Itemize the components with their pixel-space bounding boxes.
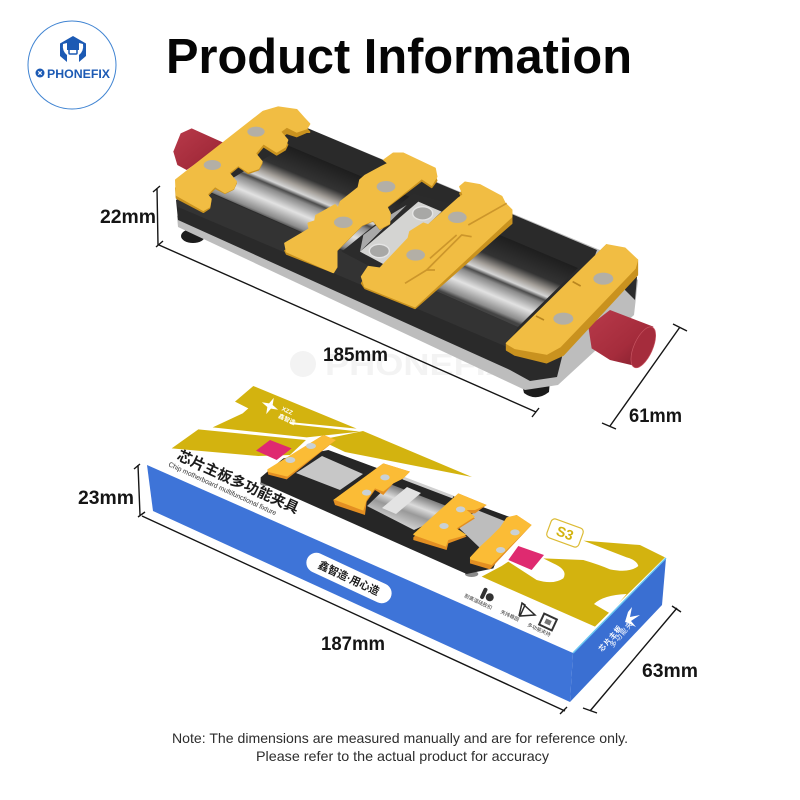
box brand mark on gold: XZZ: [280, 407, 294, 417]
box fixture yellow bars: [333, 463, 532, 569]
center chip plate: [342, 193, 457, 272]
box edge highlight: [573, 558, 666, 653]
right red knob: [588, 310, 661, 371]
dimension: height 22mm: [100, 186, 163, 247]
gold wedge behind fixture: [320, 431, 472, 477]
box fixture image: [256, 435, 544, 577]
box top face: [147, 386, 666, 653]
box feature icons: [463, 587, 557, 638]
icon: thermometer and hand: [479, 587, 496, 603]
feature label stable: 夹持稳固: [499, 608, 520, 623]
left red knob: [173, 128, 225, 170]
gold pattern front-right: [482, 541, 665, 627]
box slogan pill: 鑫智造·用心造: [316, 558, 382, 598]
footnote: Note: The dimensions are measured manually and are for reference only.: [172, 730, 628, 746]
dimension: length 187mm: [142, 516, 567, 714]
logo wordmark: PHONEFIX: [47, 69, 110, 81]
slide channel with rod: [210, 145, 578, 327]
box side branding: [597, 607, 640, 653]
box fixture body: [260, 450, 513, 577]
product: retail box: [147, 386, 666, 702]
icon: hexagon wrench phone: [60, 36, 86, 62]
footnote: Please refer to the actual product for accuracy: [256, 748, 549, 764]
box front face: [147, 465, 573, 702]
box side branding: 芯片主板: [597, 623, 624, 653]
icon: chip: [539, 614, 557, 630]
box side branding: 多功能夹: [608, 619, 635, 649]
black rails: [176, 125, 597, 381]
dimension: width 63mm: [583, 606, 698, 713]
product: repair fixture: [173, 107, 661, 397]
box fixture yellow bar left: [267, 435, 336, 479]
right end block: [620, 270, 637, 300]
watermark: PHONEFIX: [325, 347, 510, 382]
box model badge S3: [546, 518, 584, 548]
dimension: width 63mm: 63mm: [642, 661, 698, 682]
box fixture pink knob left: [256, 440, 292, 460]
dimension: height 23mm: [78, 464, 145, 517]
dimension: length 185mm: [159, 245, 539, 417]
icon: x circle: [36, 68, 44, 78]
dimension: length 185mm: 185mm: [323, 345, 388, 366]
yellow clamp bar right end: [507, 245, 637, 363]
box fixture pink knob right: [508, 546, 544, 570]
silver base plate: [177, 125, 638, 390]
box fixture channels: [296, 456, 363, 490]
dimension: width 61mm: 61mm: [629, 406, 682, 427]
box fixture upper rod: [403, 478, 453, 497]
yellow clamp bar right-center: [362, 182, 512, 308]
yellow clamp bar middle: [285, 153, 437, 272]
box heading chinese: 芯片主板多功能夹具: [174, 446, 302, 518]
box brand mark on gold: 鑫智造: [277, 412, 297, 427]
footnote: [172, 730, 628, 764]
left foot: [181, 229, 205, 243]
feature label multi: 多功能夹持: [526, 621, 552, 638]
front rail top shading: [176, 193, 518, 347]
logo badge: [28, 21, 116, 109]
title: Product Information: [166, 30, 632, 84]
gold pattern rear-left: [172, 386, 360, 456]
box brand mark on gold: [258, 394, 301, 427]
right foot: [521, 380, 550, 397]
icon: triangle: [519, 603, 535, 616]
box fixture chip: [382, 487, 421, 514]
dimension: width 61mm: [602, 324, 687, 429]
dimension: height 22mm: 22mm: [100, 207, 156, 228]
box slogan pill: [303, 549, 395, 607]
yellow clamp bar left: [176, 107, 309, 212]
feature label heat: 耐高温硅胶扣: [463, 592, 493, 611]
box heading english: Chip motherboard multifunctional fixture: [167, 461, 277, 517]
dimension: height 23mm: 23mm: [78, 488, 134, 509]
dimension: length 187mm: 187mm: [321, 634, 385, 655]
box side face: [570, 558, 666, 702]
box model badge S3: S3: [554, 523, 576, 544]
